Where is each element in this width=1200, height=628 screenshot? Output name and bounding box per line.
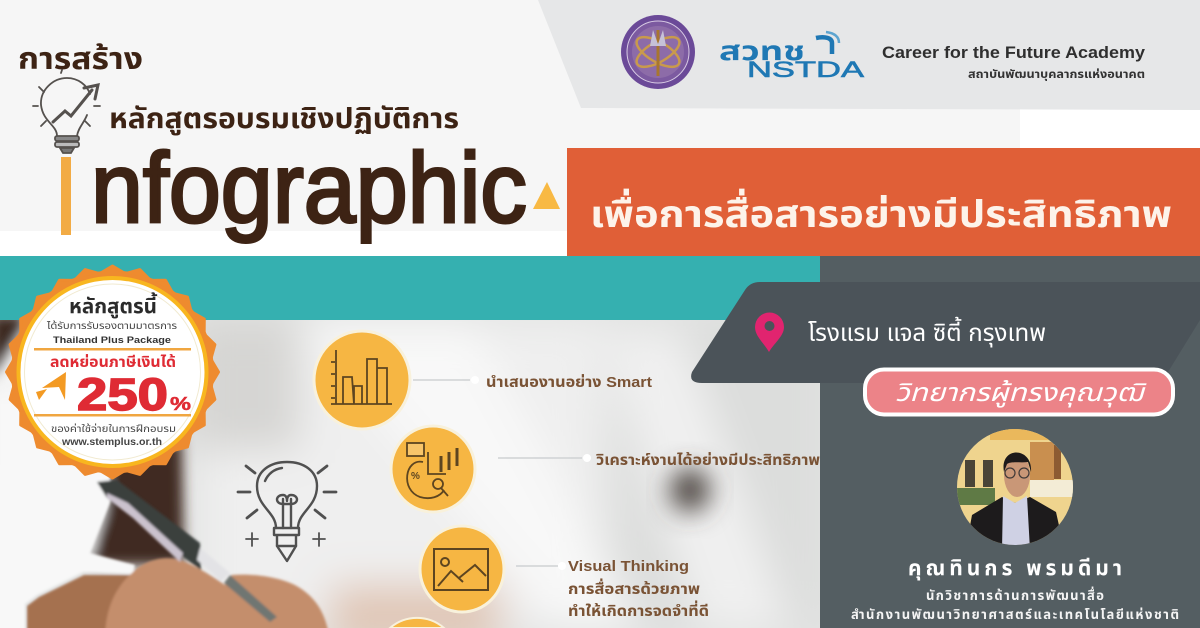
academy name: Career for the Future Academy (882, 43, 1146, 62)
photo: speaker portrait (955, 427, 1075, 550)
icon: analysis circle: % (411, 471, 420, 482)
speaker organisation: สำนักงานพัฒนาวิทยาศาสตร์และเทคโนโลยีแห่งชาติ (851, 607, 1179, 622)
label: การสื่อสารด้วยภาพ (568, 578, 700, 598)
logo: NSTDA: สวทช (719, 36, 805, 66)
title: Infographic: nfographic (91, 133, 527, 244)
pill: expert speaker (865, 370, 1173, 414)
icon: lightbulb with arrow (33, 70, 100, 153)
header background (0, 0, 1200, 256)
badge number: 250 (77, 369, 168, 420)
icon: picture circle (420, 526, 504, 612)
logo: NSTDA (719, 32, 865, 82)
location text: โรงแรม แจล ซิตี้ กรุงเทพ (808, 316, 1046, 348)
item: Smart presentation (314, 331, 652, 429)
label: Visual Thinking (568, 558, 689, 575)
pill: expert speaker: วิทยากรผู้ทรงคุณวุฒิ (895, 379, 1148, 408)
panel: location banner (691, 282, 1200, 383)
panel: logo band (538, 0, 1200, 110)
badge arrows (36, 372, 66, 400)
badge number (77, 369, 191, 420)
logo: NSTDA: NSTDA (747, 57, 865, 82)
subtitle: เพื่อการสื่อสารอย่างมีประสิทธิภาพ (590, 188, 1172, 235)
label: ทำให้เกิดการจดจำที่ดี (568, 600, 709, 620)
label (568, 558, 709, 620)
heading: workshop course: หลักสูตรอบรมเชิงปฏิบัติการ (109, 103, 459, 136)
fingers (105, 558, 330, 628)
panel: dark side panel (820, 256, 1200, 628)
icon: bar chart circle (314, 331, 410, 429)
icon: partially visible fourth circle (390, 618, 444, 628)
academy subtitle: สถาบันพัฒนาบุคลากรแห่งอนาคต (968, 67, 1145, 81)
panel: subtitle band (567, 148, 1200, 256)
item: visual thinking (420, 526, 709, 620)
badge footer: ของค่าใช้จ่ายในการฝึกอบรม (51, 422, 176, 435)
badge heading: หลักสูตรนี้ (69, 292, 158, 318)
badge: tax deduction (6, 266, 218, 478)
soft dark fold (670, 468, 710, 512)
badge number: % (170, 394, 191, 414)
icon: analysis circle (391, 426, 475, 512)
speaker title: นักวิชาการด้านการพัฒนาสื่อ (926, 586, 1104, 603)
label: นำเสนองานอย่าง Smart (486, 373, 652, 391)
icon: large lightbulb (238, 462, 336, 561)
connector (413, 379, 470, 381)
badge package: Thailand Plus Package (53, 335, 171, 346)
sleeve (0, 465, 135, 628)
icon: yellow triangle (533, 182, 560, 209)
badge url: www.stemplus.or.th (61, 437, 162, 448)
badge discount text: ลดหย่อนภาษีเงินได้ (50, 353, 176, 371)
badge line: ได้รับการรับรองตามมาตรการ (46, 321, 177, 332)
photo: hand writing with a pen (0, 315, 820, 628)
label: วิเคราะห์งานได้อย่างมีประสิทธิภาพ (595, 451, 820, 469)
heading: build: การสร้าง (18, 43, 143, 76)
icon: university seal (621, 15, 695, 89)
speaker name: คุณทินกร พรมดีมา (908, 557, 1122, 581)
connector (498, 457, 582, 459)
pen body (97, 480, 201, 570)
forearm (27, 575, 135, 628)
item: effective analysis (391, 426, 820, 512)
icon: map pin (755, 312, 784, 352)
connector (516, 565, 558, 567)
teal band (0, 256, 820, 320)
icon: letter I bar (61, 157, 71, 235)
